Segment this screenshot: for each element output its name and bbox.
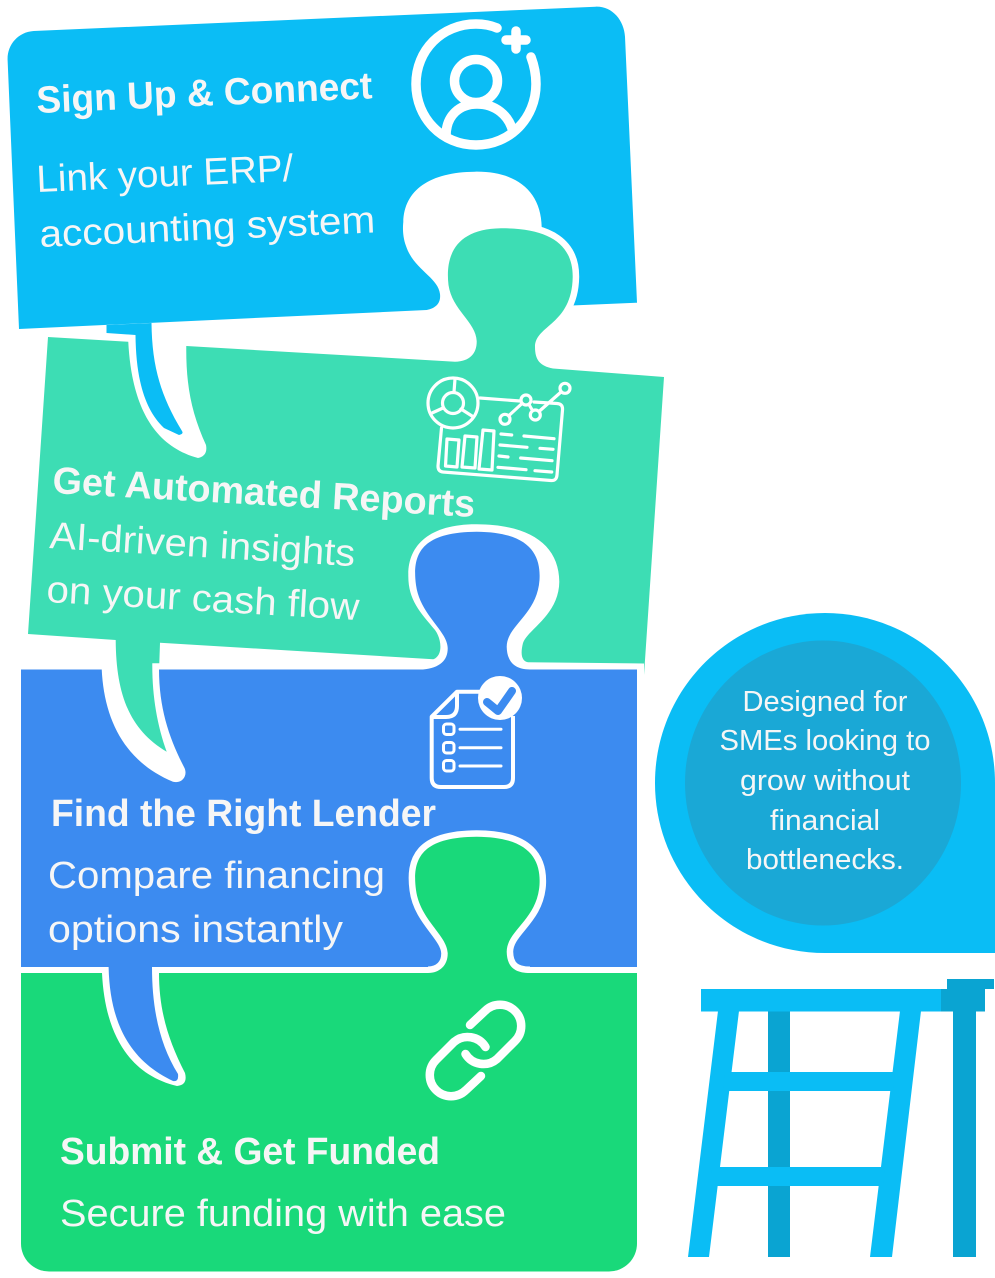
icon: checklist [432, 676, 522, 787]
panel: submit and get funded [21, 973, 637, 1272]
knob outline: automated reports [448, 228, 573, 347]
text: accounting system: accounting system [39, 199, 376, 256]
text: secure funding with ease: Secure funding with ease [60, 1193, 506, 1235]
callout: designed for SMEs: bottlenecks. [746, 844, 904, 876]
tail outline: automated reports [102, 669, 186, 782]
text: AI-driven insights: AI-driven insights [48, 515, 356, 575]
tail outline: find the right lender [102, 973, 186, 1086]
heading: sign up and connect: Sign Up & Connect [36, 65, 373, 122]
callout: designed for SMEs: grow without [740, 765, 910, 797]
text: options instantly: options instantly [48, 909, 343, 951]
heading: find the right lender: Find the Right Lender [51, 793, 436, 835]
icon: dashboard [428, 378, 570, 481]
knob: submit and get funded [400, 837, 560, 985]
tail outline: sign up [128, 335, 206, 458]
panel: get automated reports [28, 228, 664, 752]
heading: submit and get funded: Submit & Get Funded [60, 1131, 440, 1173]
callout: designed for SMEs [655, 613, 995, 953]
text: on your cash flow: on your cash flow [45, 569, 361, 629]
icon: chain link [430, 1005, 521, 1096]
illustration: stool [688, 979, 994, 1257]
text: compare financing: Compare financing [48, 855, 385, 897]
panel: sign up body [8, 7, 637, 329]
panel: find the right lender [21, 532, 637, 1081]
heading: get automated reports: Get Automated Reports [51, 460, 476, 526]
text: link your ERP: Link your ERP/ [36, 148, 295, 201]
knob outline: submit and get funded [415, 837, 540, 973]
callout: designed for SMEs: SMEs looking to [720, 725, 930, 757]
callout: designed for SMEs: financial [770, 805, 880, 837]
callout: designed for SMEs: Designed for [742, 686, 908, 718]
icon: user with plus [416, 24, 536, 145]
tail: sign up [106, 323, 183, 435]
